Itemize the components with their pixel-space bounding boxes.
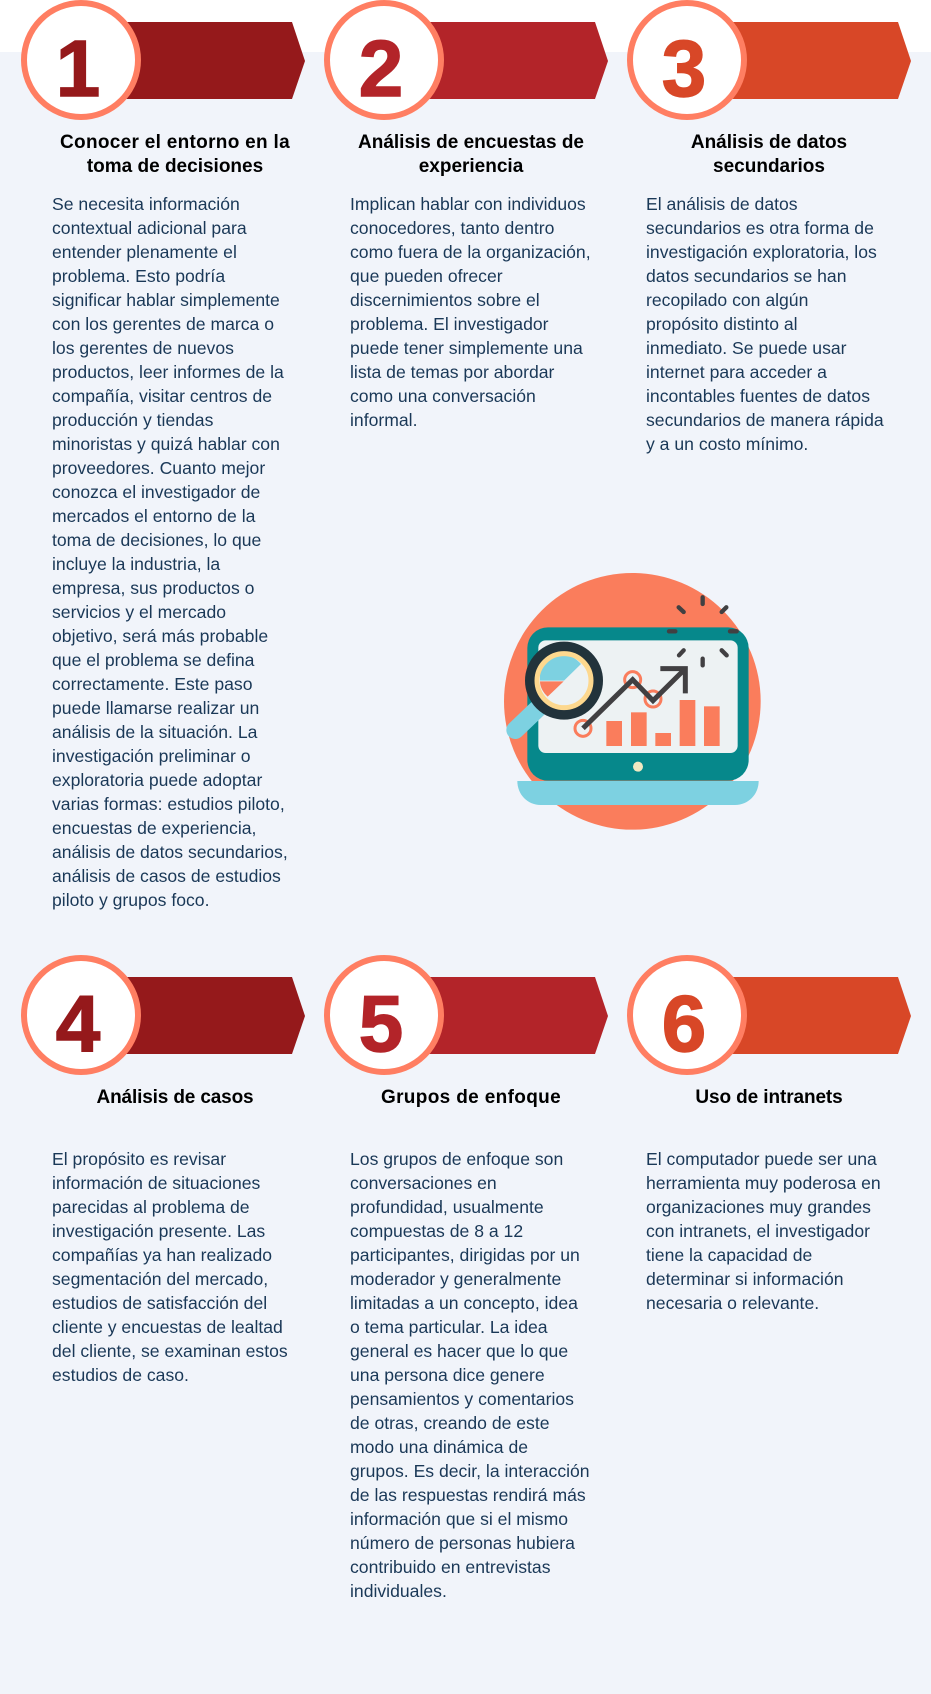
orange circle (504, 573, 761, 830)
text 5: individuales. (350, 1581, 447, 1601)
text 1: proveedores. Cuanto mejor (52, 458, 265, 478)
text 5: participantes, dirigidas por un (350, 1245, 580, 1265)
text 1: varias formas: estudios piloto, (52, 794, 285, 814)
text 6: determinar si información (646, 1269, 844, 1289)
step 3 badge (627, 0, 911, 120)
step 5 badge: 5 (359, 979, 403, 1068)
text 1: análisis de datos secundarios, (52, 842, 288, 862)
lens chart (540, 655, 581, 681)
text 1: piloto y grupos foco. (52, 890, 209, 910)
step 1 badge (21, 0, 305, 120)
text 5: contribuido en entrevistas (350, 1557, 550, 1577)
power dot (633, 762, 643, 772)
text 3: internet para acceder a (646, 362, 827, 382)
text 6: necesaria o relevante. (646, 1293, 819, 1313)
text 5: modo una dinámica de (350, 1437, 528, 1457)
text 6: El computador puede ser una (646, 1149, 877, 1169)
text 3: y a un costo mínimo. (646, 434, 808, 454)
step 2 badge (324, 0, 608, 120)
text 5: general es hacer que lo que (350, 1341, 568, 1361)
step 6 badge (627, 955, 911, 1075)
text 1: significar hablar simplemente (52, 290, 280, 310)
text 5: o tema particular. La idea (350, 1317, 548, 1337)
text 2: que pueden ofrecer (350, 266, 503, 286)
text 5: pensamientos y comentarios (350, 1389, 574, 1409)
text 2: lista de temas por abordar (350, 362, 554, 382)
magnifier lens (530, 647, 598, 715)
heading 1: Conocer el entorno en la (60, 132, 290, 153)
heading 1 (60, 132, 290, 176)
text 1: contextual adicional para (52, 218, 247, 238)
text 1: empresa, sus productos o (52, 578, 254, 598)
lens rim (537, 654, 591, 708)
text 6: tiene la capacidad de (646, 1245, 812, 1265)
text 5: limitadas a un concepto, idea (350, 1293, 578, 1313)
text 4: estudios de satisfacción del (52, 1293, 267, 1313)
text 1: los gerentes de nuevos (52, 338, 234, 358)
text 4: cliente y encuestas de lealtad (52, 1317, 283, 1337)
laptop body (527, 627, 749, 781)
text 2: Implican hablar con individuos (350, 194, 586, 214)
heading 1: toma de decisiones (87, 156, 263, 176)
step 1 badge: 1 (56, 24, 100, 113)
text 1: puede llamarse realizar un (52, 698, 259, 718)
text 4: segmentación del mercado, (52, 1269, 268, 1289)
laptop base (517, 781, 759, 805)
text 2 (350, 194, 591, 430)
illustration: laptop with chart and magnifier (504, 573, 761, 830)
text 4: compañías ya han realizado (52, 1245, 272, 1265)
text 2: discernimientos sobre el (350, 290, 540, 310)
heading 4: Análisis de casos (97, 1087, 253, 1108)
text 4: estudios de caso. (52, 1365, 189, 1385)
step 4 badge (21, 955, 305, 1075)
step 5 badge (324, 955, 608, 1075)
step 3 badge: 3 (662, 24, 706, 113)
heading 2: Análisis de encuestas de (358, 132, 584, 153)
sparkle ticks (669, 597, 737, 665)
text 1: minoristas y quizá hablar con (52, 434, 280, 454)
text 1: exploratoria puede adoptar (52, 770, 262, 790)
text 6: con intranets, el investigador (646, 1221, 870, 1241)
text 6: herramienta muy poderosa en (646, 1173, 881, 1193)
text 1: encuestas de experiencia, (52, 818, 256, 838)
text 3: investigación exploratoria, los (646, 242, 877, 262)
text 3: recopilado con algún (646, 290, 808, 310)
text 4: El propósito es revisar (52, 1149, 226, 1169)
text 5: una persona dice genere (350, 1365, 545, 1385)
text 3: inmediato. Se puede usar (646, 338, 847, 358)
text 4: parecidas al problema de (52, 1197, 250, 1217)
heading 6: Uso de intranets (695, 1087, 843, 1108)
text 1: compañía, visitar centros de (52, 386, 272, 406)
text 5: Los grupos de enfoque son (350, 1149, 563, 1169)
text 5 (350, 1149, 590, 1601)
text 3: incontables fuentes de datos (646, 386, 870, 406)
text 2: conocedores, tanto dentro (350, 218, 554, 238)
text 4 (52, 1149, 288, 1385)
text 2: como una conversación (350, 386, 536, 406)
text 3: datos secundarios se han (646, 266, 847, 286)
text 2: como fuera de la organización, (350, 242, 591, 262)
text 1: incluye la industria, la (52, 554, 220, 574)
text 1: problema. Esto podría (52, 266, 225, 286)
heading 3 (691, 132, 847, 176)
trend arrow (583, 668, 686, 728)
text 1: mercados el entorno de la (52, 506, 255, 526)
step 6 badge: 6 (662, 979, 706, 1068)
text 1: producción y tiendas (52, 410, 213, 430)
text 1: con los gerentes de marca o (52, 314, 274, 334)
step 4 badge: 4 (56, 979, 101, 1068)
text 6 (646, 1149, 881, 1313)
text 3 (646, 194, 884, 454)
text 1: investigación preliminar o (52, 746, 251, 766)
text 5: moderador y generalmente (350, 1269, 561, 1289)
text 2: informal. (350, 410, 417, 430)
text 3: propósito distinto al (646, 314, 798, 334)
text 6: organizaciones muy grandes (646, 1197, 871, 1217)
text 5: grupos. Es decir, la interacción (350, 1461, 590, 1481)
bars (606, 700, 720, 746)
text 1: correctamente. Este paso (52, 674, 252, 694)
text 1: análisis de casos de estudios (52, 866, 281, 886)
heading 3: Análisis de datos (691, 132, 847, 153)
text 1 (52, 194, 288, 910)
text 5: profundidad, usualmente (350, 1197, 544, 1217)
text 1: que el problema se defina (52, 650, 254, 670)
text 1: servicios y el mercado (52, 602, 226, 622)
text 3: secundarios es otra forma de (646, 218, 874, 238)
text 4: del cliente, se examinan estos (52, 1341, 288, 1361)
heading 2 (358, 132, 584, 176)
text 5: conversaciones en (350, 1173, 497, 1193)
heading 2: experiencia (419, 156, 523, 176)
text 5: número de personas hubiera (350, 1533, 575, 1553)
heading 3: secundarios (713, 156, 825, 176)
text 5: de otras, creando de este (350, 1413, 550, 1433)
heading 5: Grupos de enfoque (381, 1087, 561, 1108)
text 1: entender plenamente el (52, 242, 237, 262)
screen (538, 640, 738, 753)
text 1: análisis de la situación. La (52, 722, 257, 742)
text 5: de las respuestas rendirá más (350, 1485, 586, 1505)
text 2: puede tener simplemente una (350, 338, 583, 358)
magnifier handle (515, 700, 547, 730)
text 5: compuestas de 8 a 12 (350, 1221, 523, 1241)
text 1: conozca el investigador de (52, 482, 260, 502)
step 2 badge: 2 (359, 24, 403, 113)
text 4: información de situaciones (52, 1173, 260, 1193)
data point markers (575, 672, 661, 736)
text 2: problema. El investigador (350, 314, 549, 334)
text 4: investigación presente. Las (52, 1221, 265, 1241)
text 1: Se necesita información (52, 194, 240, 214)
text 5: información que si el mismo (350, 1509, 568, 1529)
text 1: objetivo, será más probable (52, 626, 268, 646)
text 1: productos, leer informes de la (52, 362, 284, 382)
text 3: El análisis de datos (646, 194, 798, 214)
text 1: toma de decisiones, lo que (52, 530, 261, 550)
text 3: secundarios de manera rápida (646, 410, 884, 430)
